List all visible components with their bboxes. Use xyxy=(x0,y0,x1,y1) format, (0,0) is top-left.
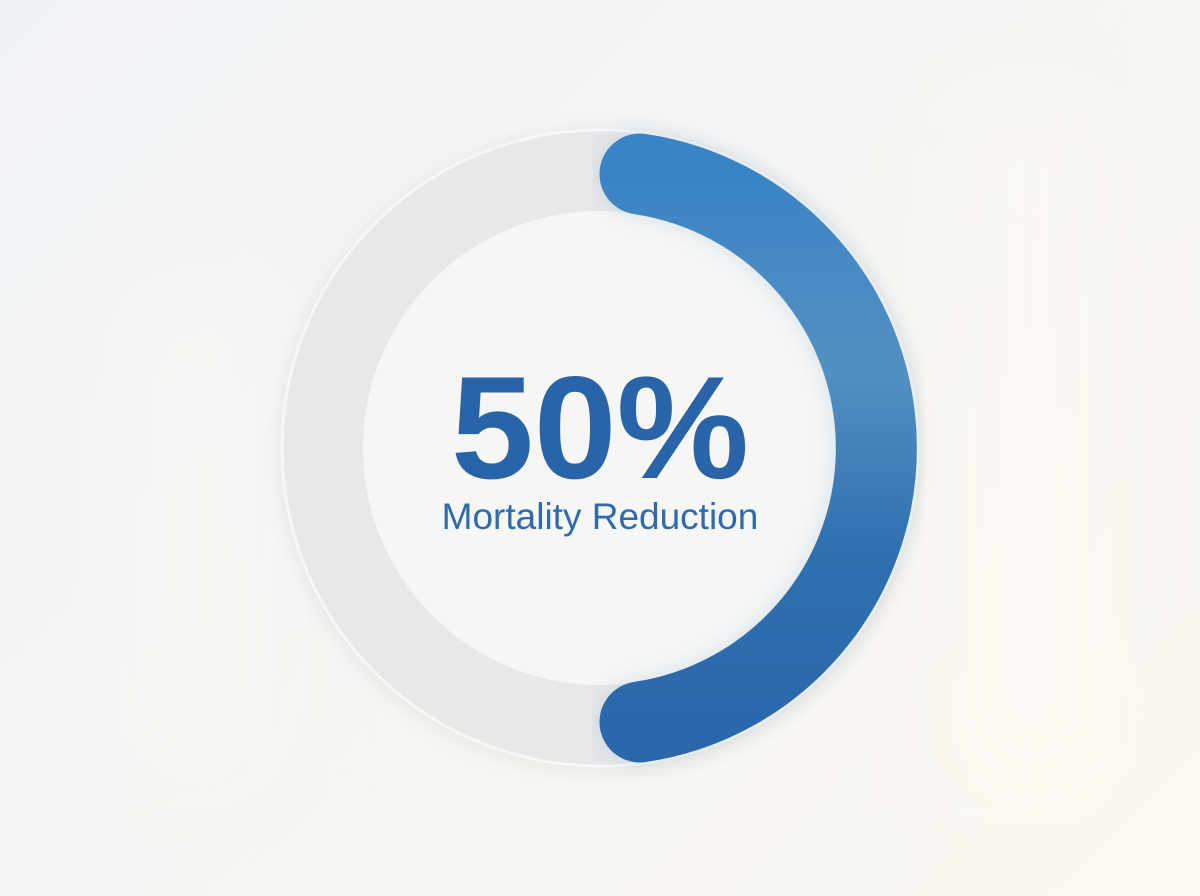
progress arc 50% xyxy=(640,174,876,722)
value text: 50% xyxy=(451,346,749,509)
label text: Mortality Reduction xyxy=(442,496,758,537)
ring background xyxy=(278,130,922,774)
